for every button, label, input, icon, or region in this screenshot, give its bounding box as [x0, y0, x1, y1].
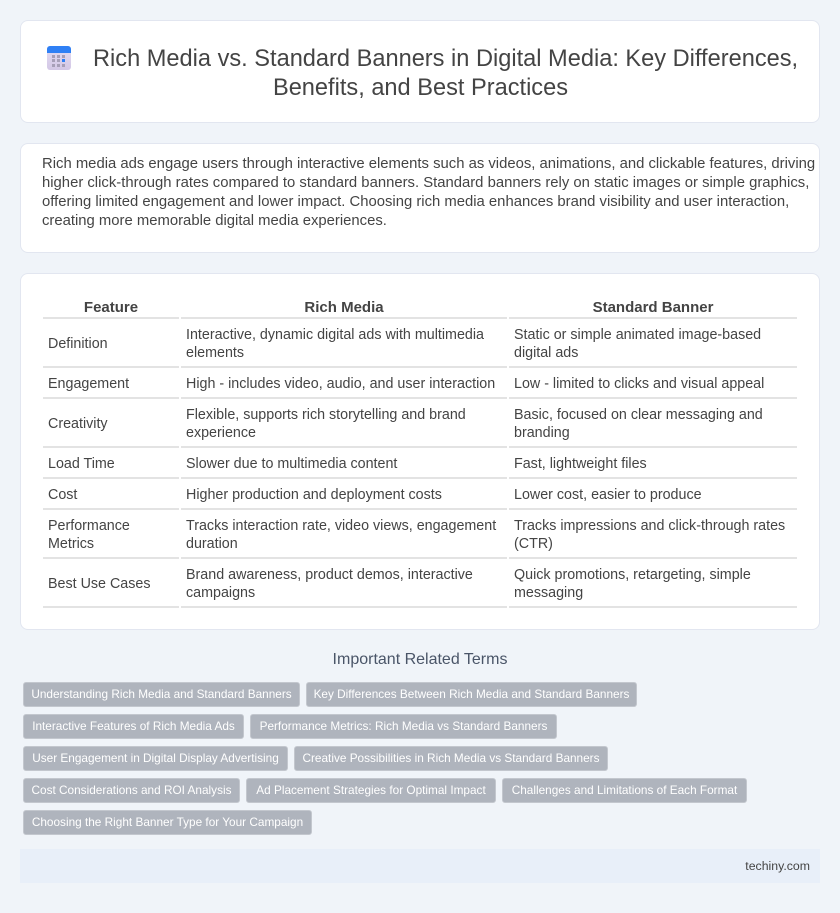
- row: Performance Metrics: [48, 518, 785, 552]
- row: Definition: [48, 327, 761, 361]
- row: Performance Metrics: Metrics: [48, 536, 94, 552]
- row: Creativity: Creativity: [48, 416, 108, 432]
- table headers: Standard Banner: [593, 299, 713, 316]
- title: Rich Media vs. Standard Banners in Digital Media: Key Differences,: [93, 46, 798, 72]
- tags: related terms: Cost Considerations and ROI Analysis: [32, 783, 232, 797]
- footer credit: techiny.com: [745, 859, 810, 873]
- tags: related terms: Creative Possibilities in Rich Media vs Standard Banners: [302, 751, 600, 765]
- panel: intro: [20, 143, 820, 253]
- row: Load Time: Slower due to multimedia content: [186, 456, 397, 472]
- tags: related terms: Key Differences Between Rich Media and Standard Banners: [314, 687, 629, 701]
- footer bar: [20, 849, 820, 883]
- related terms heading: Important Related Terms: [333, 651, 507, 668]
- title: [93, 46, 798, 101]
- intro text: Rich media ads engage users through interactive elements such as videos, animations, and clickable features, driving: [42, 156, 815, 172]
- tags: related terms: Performance Metrics: Rich Media vs Standard Banners: [260, 719, 547, 733]
- row: Performance Metrics: (CTR): [514, 536, 553, 552]
- table headers: Rich Media: [304, 299, 384, 316]
- panel: comparison table: [20, 273, 820, 630]
- intro text: creating more memorable digital media experiences.: [42, 213, 387, 229]
- row: Creativity: Flexible, supports rich storytelling and brand: [186, 407, 466, 423]
- row: Performance Metrics: Performance: [48, 518, 130, 534]
- table headers: Feature: [84, 299, 138, 316]
- row: Cost: [48, 487, 702, 503]
- tags: related terms: User Engagement in Digital Display Advertising: [32, 751, 279, 765]
- row: Best Use Cases: [48, 567, 751, 601]
- title: Benefits, and Best Practices: [273, 75, 568, 101]
- tags: related terms: Ad Placement Strategies for Optimal Impact: [256, 783, 486, 797]
- tags: related terms: [23, 682, 747, 835]
- row: Best Use Cases: Best Use Cases: [48, 576, 151, 592]
- row: Engagement: [48, 376, 764, 392]
- row: Definition: digital ads: [514, 345, 578, 361]
- row: Engagement: Engagement: [48, 376, 129, 392]
- row: Cost: Cost: [48, 487, 77, 503]
- row: Best Use Cases: Quick promotions, retargeting, simple: [514, 567, 751, 583]
- row: Creativity: Basic, focused on clear messaging and: [514, 407, 763, 423]
- table headers: [84, 299, 714, 316]
- tags: related terms: Choosing the Right Banner Type for Your Campaign: [32, 815, 303, 829]
- row: Performance Metrics: Tracks impressions and click-through rates: [514, 518, 785, 534]
- row: Definition: Static or simple animated image-based: [514, 327, 761, 343]
- row: Cost: Higher production and deployment costs: [186, 487, 442, 503]
- row: Best Use Cases: messaging: [514, 585, 583, 601]
- row: Definition: Definition: [48, 336, 108, 352]
- row: Creativity: branding: [514, 425, 570, 441]
- row: Load Time: Fast, lightweight files: [514, 456, 647, 472]
- row: Performance Metrics: duration: [186, 536, 238, 552]
- row: Performance Metrics: Tracks interaction rate, video views, engagement: [186, 518, 496, 534]
- row: Load Time: [48, 456, 647, 472]
- intro text: [42, 156, 815, 229]
- row: Engagement: Low - limited to clicks and visual appeal: [514, 376, 764, 392]
- panel: title card: [20, 20, 820, 123]
- row: Definition: elements: [186, 345, 244, 361]
- row: Definition: Interactive, dynamic digital ads with multimedia: [186, 327, 484, 343]
- intro text: higher click-through rates compared to standard banners. Standard banners rely on static images or simple graphics,: [42, 175, 809, 191]
- row: Best Use Cases: Brand awareness, product demos, interactive: [186, 567, 473, 583]
- intro text: offering limited engagement and lower impact. Choosing rich media enhances brand visibility and user interaction,: [42, 194, 789, 210]
- row: Cost: Lower cost, easier to produce: [514, 487, 702, 503]
- row: Creativity: [48, 407, 763, 441]
- row: Best Use Cases: campaigns: [186, 585, 255, 601]
- tags: related terms: Interactive Features of Rich Media Ads: [32, 719, 235, 733]
- row: Load Time: Load Time: [48, 456, 115, 472]
- tags: related terms: Challenges and Limitations of Each Format: [512, 783, 737, 797]
- tags: related terms: Understanding Rich Media and Standard Banners: [31, 687, 292, 701]
- row: Engagement: High - includes video, audio, and user interaction: [186, 376, 495, 392]
- icon: calendar: [47, 46, 71, 70]
- row: Creativity: experience: [186, 425, 256, 441]
